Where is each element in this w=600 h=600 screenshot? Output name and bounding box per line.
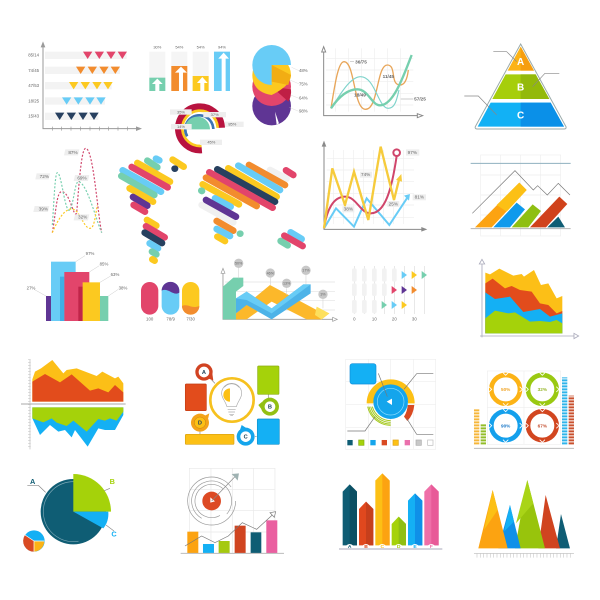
panel: overlapping bars bbox=[27, 251, 127, 321]
blue peak bbox=[498, 505, 521, 548]
panel: stacked pie layers: 64% bbox=[299, 95, 308, 100]
panel: target bar chart bbox=[181, 468, 284, 553]
panel: arrow bars bbox=[149, 44, 230, 91]
dashed lines bbox=[52, 148, 102, 233]
letters: B bbox=[364, 544, 368, 550]
letters: D bbox=[397, 544, 401, 550]
ruler bbox=[474, 553, 574, 556]
rectangles bbox=[185, 366, 279, 444]
donut labels: 37% bbox=[211, 112, 219, 117]
rings bbox=[177, 105, 223, 152]
letters: E bbox=[413, 544, 417, 550]
panel: pie chart bbox=[23, 474, 117, 552]
letters: C bbox=[381, 544, 385, 550]
ring notches bbox=[489, 373, 559, 442]
pill labels: 78/9 bbox=[166, 317, 175, 322]
blue ribbon bbox=[236, 284, 311, 319]
yellow area bbox=[485, 269, 562, 333]
line labels: 36/75 bbox=[355, 60, 367, 65]
column B bbox=[359, 502, 373, 545]
panel: triangle marker scale bbox=[352, 266, 427, 322]
red area bbox=[485, 279, 562, 333]
panel: stacked pie layers: 98% bbox=[299, 109, 308, 114]
legend squares bbox=[347, 440, 433, 445]
line label leaders bbox=[350, 62, 413, 99]
bar labels: 30% bbox=[153, 44, 162, 49]
value labels: 74% bbox=[361, 172, 370, 177]
axes bbox=[479, 259, 579, 339]
grid bbox=[326, 48, 413, 112]
teal column bbox=[223, 278, 243, 319]
row labels: 15/43 bbox=[28, 114, 40, 119]
triangles bbox=[83, 52, 127, 59]
bar labels: 27% bbox=[27, 285, 35, 290]
scale labels: 20 bbox=[392, 317, 397, 322]
dashed chart labels bbox=[33, 149, 89, 220]
donut labels: 85% bbox=[228, 122, 237, 127]
panel: pill charts bbox=[141, 282, 199, 322]
line labels: 57/25 bbox=[414, 97, 426, 102]
panel: stacked pie layers: 75% bbox=[299, 82, 308, 87]
donut labels bbox=[170, 109, 244, 145]
row labels: 74/45 bbox=[28, 68, 40, 73]
circular labels: 13% bbox=[283, 282, 291, 286]
green slice bbox=[73, 474, 111, 512]
grey pills bbox=[352, 268, 397, 313]
letter tabs bbox=[345, 544, 436, 548]
green area bbox=[32, 407, 123, 432]
bar labels: 97% bbox=[86, 251, 94, 256]
blue rectangle bbox=[350, 364, 376, 384]
bar labels: 94% bbox=[218, 44, 226, 49]
scale labels: 10 bbox=[372, 317, 377, 322]
panel: radial gauge with legend bbox=[346, 359, 436, 449]
thick teal line bbox=[331, 55, 412, 108]
bar backgrounds bbox=[149, 52, 230, 91]
bar fills bbox=[149, 52, 230, 91]
column F bbox=[424, 484, 439, 545]
bubble D: D bbox=[198, 421, 202, 427]
trend line with arrow bbox=[185, 512, 276, 546]
blue area bbox=[32, 407, 123, 447]
grid bbox=[346, 359, 436, 449]
bars bbox=[46, 262, 108, 321]
triangle markers bbox=[382, 271, 427, 309]
panel: slanted bar chart bbox=[471, 155, 571, 236]
red line bbox=[324, 156, 397, 228]
bubble B: B bbox=[268, 405, 272, 411]
panel: pyramid diagram bbox=[464, 44, 566, 129]
bubble C: C bbox=[244, 435, 248, 441]
red area bbox=[32, 374, 123, 402]
panel: mirrored area chart bbox=[21, 359, 126, 449]
grid bbox=[189, 468, 275, 553]
scale labels bbox=[353, 317, 417, 322]
value labels bbox=[342, 149, 426, 212]
red peak bbox=[538, 495, 560, 548]
leaders bbox=[464, 52, 559, 115]
dashed chart labels: 87% bbox=[68, 150, 78, 155]
target bullseye bbox=[202, 492, 221, 510]
bar labels: 54% bbox=[197, 44, 205, 49]
Eurasia bbox=[201, 165, 293, 208]
line labels: 18/49 bbox=[354, 92, 366, 97]
bar labels bbox=[27, 251, 127, 290]
column E bbox=[408, 493, 422, 545]
grid bbox=[327, 150, 414, 224]
central ring bbox=[210, 378, 254, 422]
pyramid outline bbox=[475, 44, 566, 129]
main pie bbox=[39, 477, 108, 546]
value labels: 38% bbox=[344, 207, 353, 212]
orange line bbox=[331, 62, 408, 109]
white arrows bbox=[152, 53, 229, 91]
ring marker bbox=[393, 149, 400, 156]
bars bbox=[187, 520, 277, 553]
baseline bbox=[181, 552, 284, 555]
letters: A bbox=[348, 544, 352, 550]
panel: triangle rows chart bbox=[28, 41, 142, 131]
ring 67%: 67% bbox=[538, 423, 548, 428]
slanted bars bbox=[475, 183, 567, 227]
vertical scale lines bbox=[354, 266, 424, 314]
pill labels bbox=[146, 317, 195, 322]
panel: concentric donut chart bbox=[170, 105, 244, 152]
inner half disc bbox=[185, 117, 210, 129]
row labels: 18/25 bbox=[28, 98, 40, 103]
letters: F bbox=[430, 544, 433, 550]
blue layer bbox=[252, 45, 291, 85]
axes bbox=[322, 47, 423, 118]
blue area bbox=[485, 292, 562, 333]
value labels: 81% bbox=[415, 195, 424, 200]
red pill bbox=[141, 282, 158, 315]
letter B: B bbox=[110, 477, 115, 486]
panel: striped world map bbox=[121, 159, 303, 261]
pill labels: 7/30 bbox=[186, 317, 195, 322]
donut labels: 45% bbox=[207, 140, 216, 145]
circular labels bbox=[234, 259, 328, 308]
segmented side bars bbox=[477, 377, 571, 444]
panel: percentage rings bbox=[474, 371, 574, 448]
pill labels: 100 bbox=[146, 317, 154, 322]
yellow ribbon bbox=[236, 285, 329, 319]
letter C: C bbox=[111, 529, 117, 538]
circular labels: 50% bbox=[235, 262, 243, 266]
panel: smooth line chart bbox=[322, 47, 426, 118]
ring 90%: 90% bbox=[501, 423, 511, 428]
bulb icon bbox=[222, 383, 242, 416]
circular labels: 3% bbox=[320, 293, 326, 297]
blue disc bbox=[373, 384, 408, 419]
axes bbox=[41, 41, 142, 131]
yellow layer bbox=[252, 56, 291, 95]
bar labels: 38% bbox=[119, 285, 127, 290]
dashed chart labels: 32% bbox=[78, 215, 87, 220]
leader lines and labels bbox=[289, 67, 299, 111]
bubble A: A bbox=[202, 370, 206, 376]
letter A: A bbox=[30, 477, 36, 486]
panel: zigzag line chart bbox=[322, 141, 427, 232]
dashed chart labels: 72% bbox=[40, 174, 49, 179]
teal peak bbox=[556, 514, 570, 548]
baseline bbox=[339, 547, 442, 550]
blue slice bbox=[73, 512, 108, 528]
red layer bbox=[252, 67, 291, 106]
tier B: B bbox=[517, 82, 524, 93]
panel: stacked pie layers bbox=[252, 45, 308, 125]
row bands bbox=[45, 52, 127, 120]
axes bbox=[322, 141, 427, 232]
blue line bbox=[324, 194, 410, 228]
bar leaders bbox=[34, 256, 118, 296]
circular labels: 46% bbox=[267, 271, 275, 275]
letters bbox=[348, 544, 433, 550]
panel: triangle peaks chart bbox=[474, 480, 574, 556]
bar labels: 54% bbox=[175, 44, 184, 49]
top and bottom rules bbox=[471, 163, 571, 229]
connectors bbox=[200, 380, 268, 437]
value labels: 25% bbox=[389, 201, 398, 206]
panel: lightbulb diagram bbox=[185, 363, 279, 446]
donut labels: 14% bbox=[177, 124, 185, 129]
column D bbox=[392, 517, 406, 545]
light teal line bbox=[331, 77, 399, 108]
green peak bbox=[515, 480, 545, 548]
ring 50%: 50% bbox=[501, 387, 511, 392]
yellow arc bbox=[370, 383, 411, 403]
South America bbox=[145, 220, 165, 261]
bar labels: 85% bbox=[100, 261, 108, 266]
value labels: 97% bbox=[408, 150, 417, 155]
grid and axes bbox=[221, 268, 337, 321]
panel: 3D ribbon chart bbox=[221, 259, 337, 321]
North America bbox=[121, 159, 184, 212]
panel: arrow column chart bbox=[339, 473, 442, 550]
Africa bbox=[202, 198, 240, 241]
panel: stacked pie layers: 48% bbox=[299, 68, 308, 73]
arrow bbox=[212, 473, 239, 501]
grid bbox=[487, 371, 561, 444]
dashed chart labels: 39% bbox=[39, 206, 48, 211]
column C bbox=[375, 473, 390, 545]
bar labels: 63% bbox=[111, 272, 119, 277]
yellow line bbox=[324, 147, 402, 228]
grid bbox=[481, 155, 561, 236]
circular labels: 17% bbox=[302, 269, 310, 273]
small pie bbox=[23, 530, 45, 552]
yellow pill bbox=[182, 282, 199, 315]
column A bbox=[343, 484, 357, 545]
line labels bbox=[354, 60, 426, 102]
donut labels: 35% bbox=[177, 109, 185, 114]
tier C: C bbox=[517, 110, 524, 121]
row labels: 47/53 bbox=[28, 83, 40, 88]
orange peak bbox=[478, 490, 508, 548]
green area bbox=[485, 311, 562, 333]
axes bbox=[21, 359, 126, 449]
panel: layered area chart bbox=[479, 259, 579, 339]
scale labels: 0 bbox=[353, 317, 356, 322]
dashed chart labels: 69% bbox=[77, 176, 87, 181]
panel: dashed line chart bbox=[33, 148, 102, 233]
tier A: A bbox=[517, 57, 524, 68]
row labels: 85/14 bbox=[28, 53, 40, 58]
ring 32%: 32% bbox=[538, 387, 548, 392]
target rings bbox=[184, 474, 239, 528]
bar labels bbox=[153, 44, 226, 49]
blue pill bbox=[162, 282, 179, 315]
row labels bbox=[28, 53, 40, 119]
Australia bbox=[281, 232, 303, 246]
leaders bbox=[347, 373, 433, 434]
red segment bbox=[404, 405, 414, 421]
trend line bbox=[472, 171, 570, 213]
line labels: 11/45 bbox=[383, 74, 394, 79]
baseline bbox=[474, 447, 574, 450]
scale labels: 30 bbox=[412, 317, 417, 322]
yellow area bbox=[32, 360, 123, 402]
purple layer bbox=[252, 87, 291, 125]
hatched green arc bbox=[368, 407, 391, 425]
